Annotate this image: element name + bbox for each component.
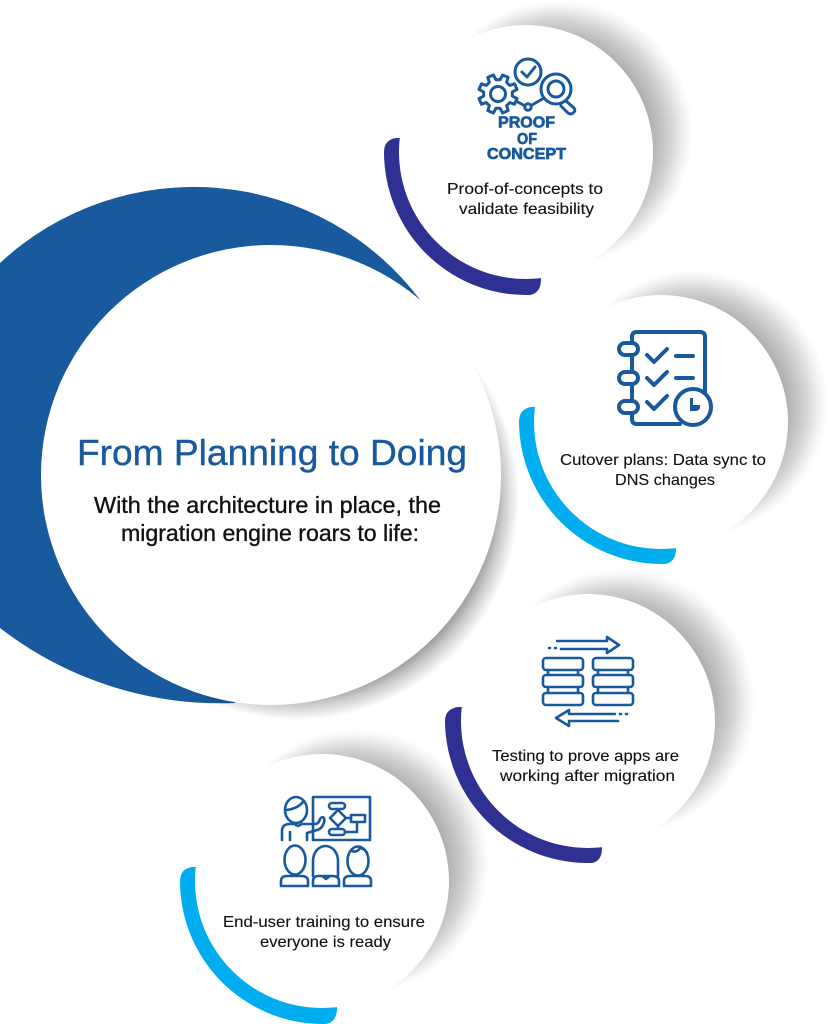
- circle shadow: [223, 729, 489, 995]
- subtitle: migration engine roars to life:: [121, 520, 419, 546]
- icon caption: proof of concept: OF: [517, 131, 537, 148]
- main circle shadow: [75, 276, 519, 720]
- panel: main heading circle: [0, 187, 519, 720]
- subtitle: [94, 492, 441, 546]
- label: [492, 748, 679, 785]
- circle shadow: [489, 569, 755, 835]
- icon: checklist with clock: [619, 332, 711, 425]
- white circle: [195, 754, 449, 1008]
- white circle: [399, 25, 653, 279]
- icon caption: proof of concept: PROOF: [498, 114, 555, 132]
- main white circle: [41, 245, 501, 705]
- icon: trainer and audience: [281, 797, 371, 886]
- label: Cutover plans: Data sync to: [560, 452, 766, 469]
- panel: testing: [445, 569, 755, 863]
- blue crescent: [0, 187, 421, 703]
- label: everyone is ready: [260, 934, 391, 951]
- label: validate feasibility: [459, 201, 594, 218]
- white circle: [534, 295, 788, 549]
- icon caption: proof of concept: CONCEPT: [487, 146, 567, 163]
- panel: proof of concept: [384, 0, 693, 295]
- label: Proof-of-concepts to: [447, 181, 603, 198]
- icon: gears, check and magnifier: [479, 59, 575, 114]
- white circle: [461, 594, 715, 848]
- dark blue arc: [384, 138, 541, 295]
- label: [560, 452, 766, 489]
- light blue arc: [180, 867, 337, 1024]
- icon caption: proof of concept: [487, 114, 567, 163]
- icon: data transfer: [543, 637, 633, 726]
- light blue arc: [519, 407, 676, 564]
- panel: cutover plans: [519, 270, 828, 564]
- panel: end-user training: [180, 729, 489, 1024]
- label: End-user training to ensure: [223, 914, 425, 931]
- label: working after migration: [499, 768, 675, 785]
- label: [447, 181, 603, 218]
- label: Testing to prove apps are: [492, 748, 679, 765]
- dark blue arc: [445, 707, 602, 863]
- subtitle: With the architecture in place, the: [94, 492, 441, 518]
- circle shadow: [427, 0, 693, 266]
- title: From Planning to Doing: [77, 432, 467, 473]
- circle shadow: [562, 270, 828, 536]
- label: [223, 914, 425, 951]
- label: DNS changes: [615, 472, 715, 489]
